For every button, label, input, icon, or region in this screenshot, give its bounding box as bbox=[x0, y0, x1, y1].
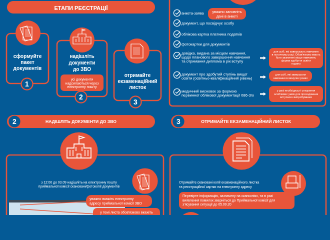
panel: step 3 card: листок bbox=[129, 85, 146, 91]
icon: university building bbox=[60, 132, 98, 170]
step number 2: 2 bbox=[79, 94, 83, 102]
note: certificate requirement: подано bbox=[291, 62, 301, 66]
checklist item: application: анкета-заява bbox=[182, 12, 205, 16]
checklist item: photo cards bbox=[174, 41, 230, 47]
icon: exam sheet bbox=[223, 132, 260, 170]
icon: bottom circle bbox=[178, 212, 204, 237]
note: electronic mail: усі документи bbox=[71, 78, 93, 82]
heading: step 3: 3 bbox=[177, 119, 181, 126]
icon: documents bbox=[132, 168, 158, 194]
panel: document checklist bbox=[170, 0, 326, 106]
callout: subject line bbox=[93, 208, 160, 220]
note: certificate requirement: в поточному році. Обов'язково мають bbox=[272, 52, 321, 56]
note: fill in carefully: дані в анкеті bbox=[216, 14, 238, 18]
panel: step 3 card: екзаменаційний bbox=[118, 78, 157, 85]
icon: documents bbox=[16, 20, 40, 46]
note: special conditions: у разі необхідності створення bbox=[277, 88, 316, 92]
panel: step 2 card: до ЗВО bbox=[73, 67, 91, 73]
panel: receive exam sheet: та реєстраційної картки на електронну адресу bbox=[179, 185, 252, 189]
title pill bbox=[7, 1, 155, 14]
panel: step 3 card bbox=[114, 38, 161, 108]
panel: step 3 card: отримайте bbox=[124, 72, 151, 79]
note: electronic mail bbox=[60, 74, 104, 91]
checklist item: education document: освіти (освітньо-кваліфікаційний рівень) bbox=[182, 77, 253, 81]
heading: step 3 bbox=[171, 115, 320, 128]
checklist item: taxpayer card: облікова картка платника податків bbox=[182, 32, 242, 36]
checklist item: certificate: та отримання диплома в рік вступу bbox=[182, 60, 243, 64]
callout: verify information: Перевірте інформацію, зазначену на сканкопіях, та в разі bbox=[182, 194, 273, 198]
screenshot: email form bbox=[9, 200, 125, 215]
checklist item: identity document: документ, що посвідчує особу bbox=[182, 22, 234, 26]
note: fill in carefully bbox=[208, 8, 246, 20]
heading: step 3: ОТРИМАЙТЕ ЕКЗАМЕНАЦІЙНИЙ ЛИСТОК bbox=[201, 119, 291, 124]
arrow bbox=[260, 56, 266, 60]
note: fill in carefully: уважно заповніть bbox=[212, 10, 242, 14]
note: certificate requirement: форма здобуття освіти bbox=[281, 58, 311, 62]
icon: top circle bbox=[224, 0, 262, 5]
note: special conditions: особливих умов для проходження bbox=[274, 92, 319, 96]
heading: step 2: 2 bbox=[13, 119, 17, 126]
checklist item: certificate: щодо планового завершення навчання bbox=[182, 56, 250, 60]
panel: step 1 card: документів bbox=[13, 66, 42, 72]
icon: printer sheet bbox=[281, 171, 306, 196]
panel: step 2 card: документи bbox=[69, 60, 95, 66]
callout: subject line: у темі листа обов'язково вкажіть bbox=[100, 210, 153, 214]
checklist item: medical report bbox=[174, 89, 254, 98]
panel: step 2 card bbox=[57, 28, 107, 103]
callout: email address bbox=[86, 195, 152, 207]
title pill: ЕТАПИ РЕЄСТРАЦІЇ bbox=[54, 5, 108, 12]
heading: step 2 bbox=[7, 115, 155, 128]
note: electronic mail: електронну пошту bbox=[67, 85, 97, 89]
note: graduates: навчання в минулих роках bbox=[273, 76, 308, 80]
checklist item: identity document bbox=[174, 20, 234, 26]
note: certificate requirement bbox=[269, 48, 323, 68]
callout: email address: уважно вкажіть електронну bbox=[90, 197, 134, 201]
note: special conditions bbox=[269, 86, 323, 102]
note: graduates: для осіб, які завершили bbox=[275, 72, 306, 76]
callout: verify information bbox=[179, 192, 294, 209]
panel: receive exam sheet: Отримайте скановані копії екзаменаційного листка bbox=[179, 180, 259, 184]
checklist item: medical report: медичний висновок за формою bbox=[182, 90, 237, 94]
panel: step 2 card: надішліть bbox=[70, 54, 94, 60]
checklist item: taxpayer card bbox=[174, 31, 242, 37]
checklist item: certificate bbox=[174, 52, 250, 64]
step number 3: 3 bbox=[134, 100, 138, 106]
checklist item: application bbox=[174, 10, 205, 16]
callout: email address: адресу приймальної комісії ЗВО bbox=[90, 202, 142, 206]
checklist item: photo cards: фотокартки для документів bbox=[182, 42, 230, 46]
callout: verify information: з'ясування ситуації до 05.09.20 bbox=[182, 203, 232, 207]
panel: receive exam sheet bbox=[170, 132, 326, 237]
panel: step 1 card bbox=[6, 20, 48, 90]
note: electronic mail: надсилаються через bbox=[65, 81, 99, 85]
step number 1: 1 bbox=[25, 82, 29, 88]
icon: university building bbox=[70, 28, 94, 52]
checklist item: education document: документ про здобутий ступінь вищої bbox=[182, 72, 248, 76]
panel: send documents bbox=[6, 132, 164, 225]
panel: step 1 card: пакет bbox=[21, 60, 35, 66]
checklist item: medical report: первинної облікової документації 086-3/о bbox=[182, 94, 254, 98]
note: certificate requirement: бути зазначені місце навчання, bbox=[276, 56, 316, 60]
checklist item: education document bbox=[174, 72, 253, 81]
arrow bbox=[260, 92, 266, 96]
panel: send documents: приймальної комісії скановані/фотокопії документів bbox=[38, 184, 120, 188]
icon: exam sheet bbox=[124, 38, 150, 64]
checklist item: certificate: довідка, видана за місцем навчання, bbox=[182, 52, 246, 56]
note: certificate requirement: для осіб, які завершують навчання bbox=[273, 50, 319, 54]
panel: step 1 card: сформуйте bbox=[13, 53, 42, 60]
callout: verify information: виявлення помилок зверніться до Приймальної комісії для bbox=[182, 198, 275, 202]
heading: step 2: НАДІШЛІТЬ ДОКУМЕНТИ ДО ЗВО bbox=[46, 119, 117, 124]
arrow bbox=[260, 75, 266, 79]
panel: send documents: з 12:00 до 03.09 надішліть на електронну пошту bbox=[41, 180, 117, 184]
note: special conditions: вступного випробування bbox=[280, 95, 312, 99]
note: graduates bbox=[269, 70, 312, 82]
